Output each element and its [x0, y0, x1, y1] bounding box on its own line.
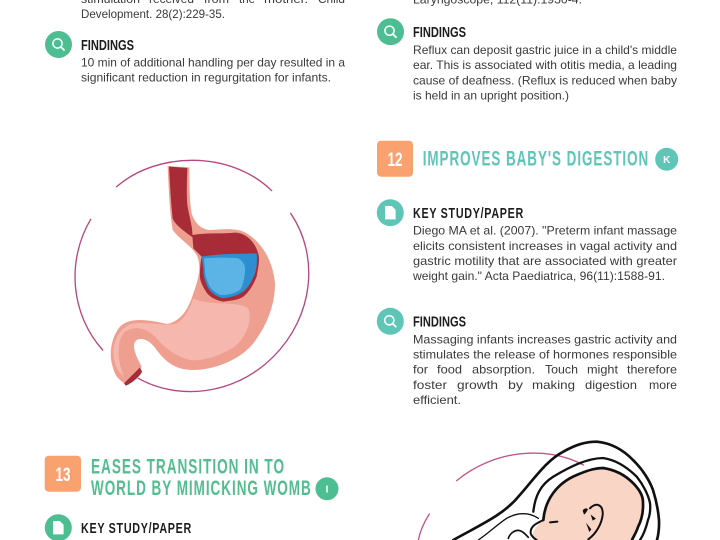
text block: digestion findings: Massaging infants increases gastric activity and: [413, 332, 677, 346]
text block: digestion findings: Touch: [545, 363, 578, 377]
text block: digestion findings: growth: [457, 378, 498, 392]
illustration: stomach in circle: [75, 160, 309, 392]
text block: digestion findings: therefore: [627, 363, 677, 377]
text block: reflux findings: cause of deafness. (Reflux is reduced when baby: [413, 74, 677, 88]
text block: digestion findings: by: [508, 378, 523, 392]
text block: Diego study: weight gain." Acta Paediatrica, 96(11):1588-91.: [412, 269, 665, 283]
text block: digestion findings: absorption.: [472, 363, 535, 377]
heading: findings (item 11): FINDINGS: [413, 25, 466, 41]
heading: findings (left): FINDINGS: [81, 38, 134, 54]
text block: digestion findings: might: [587, 363, 619, 377]
text block: left findings: 10 min of additional handling per day resulted in a: [81, 56, 345, 70]
text block: reflux findings: Reflux can deposit gastric juice in a child's middle: [413, 43, 677, 57]
badge: reference K: [655, 148, 678, 171]
text block: left study citation end: [81, 0, 345, 21]
icon: findings magnifier (left): [45, 31, 72, 58]
heading: findings (item 12): FINDINGS: [413, 315, 466, 331]
text block: reflux findings: ear. This is associated with otitis media, a leading: [413, 58, 677, 72]
heading: eases transition: [91, 456, 312, 500]
text block: Diego study: Diego MA et al. (2007). "Preterm infant massage: [413, 224, 677, 238]
text block: digestion findings: food: [437, 363, 462, 377]
badge: number 13: [45, 456, 81, 492]
text block: Diego study: elicits consistent increases in vagal activity and: [413, 239, 677, 253]
badge: number 12: [377, 141, 413, 177]
text block: digestion findings: stimulates the release of hormones responsible: [413, 347, 677, 361]
heading: eases transition: WORLD BY MIMICKING WOMB: [91, 477, 312, 500]
badge: reference I: [316, 477, 338, 500]
badge: reference K: K: [663, 155, 671, 166]
illustration: baby in womb: [418, 442, 659, 540]
text block: digestion findings: for: [413, 363, 428, 377]
text block: digestion findings: more: [649, 378, 677, 392]
heading: key study (item 12): KEY STUDY/PAPER: [413, 205, 524, 222]
badge: number 12: 12: [388, 150, 402, 171]
text block: digestion findings: making: [532, 378, 575, 392]
text block: left findings: [81, 56, 345, 84]
badge: number 13: 13: [56, 465, 70, 486]
badge: reference I: I: [326, 484, 329, 496]
text block: reflux findings: [413, 43, 677, 102]
heading: eases transition: EASES TRANSITION IN TO: [91, 456, 285, 479]
heading: key study (item 13): KEY STUDY/PAPER: [81, 520, 192, 537]
text block: Diego study: gastric motility that are associated with greater: [413, 254, 677, 268]
text block: digestion findings: [413, 332, 677, 407]
text block: digestion findings: efficient.: [413, 393, 461, 407]
icon: findings magnifier (item 12): [377, 308, 404, 335]
text block: digestion findings: digestion: [585, 378, 637, 392]
icon: findings magnifier (item 11): [377, 18, 404, 45]
text block: reflux findings: is held in an upright position.): [413, 88, 569, 102]
text block: left findings: significant reduction in regurgitation for infants.: [81, 70, 331, 84]
text block: digestion findings: foster: [413, 378, 447, 392]
text block: Diego study: [412, 224, 677, 283]
icon: document (item 12): [377, 199, 404, 226]
icon: document (item 13): [45, 514, 72, 540]
text block: left study citation end: Development. 28(2):229-35.: [81, 7, 225, 21]
